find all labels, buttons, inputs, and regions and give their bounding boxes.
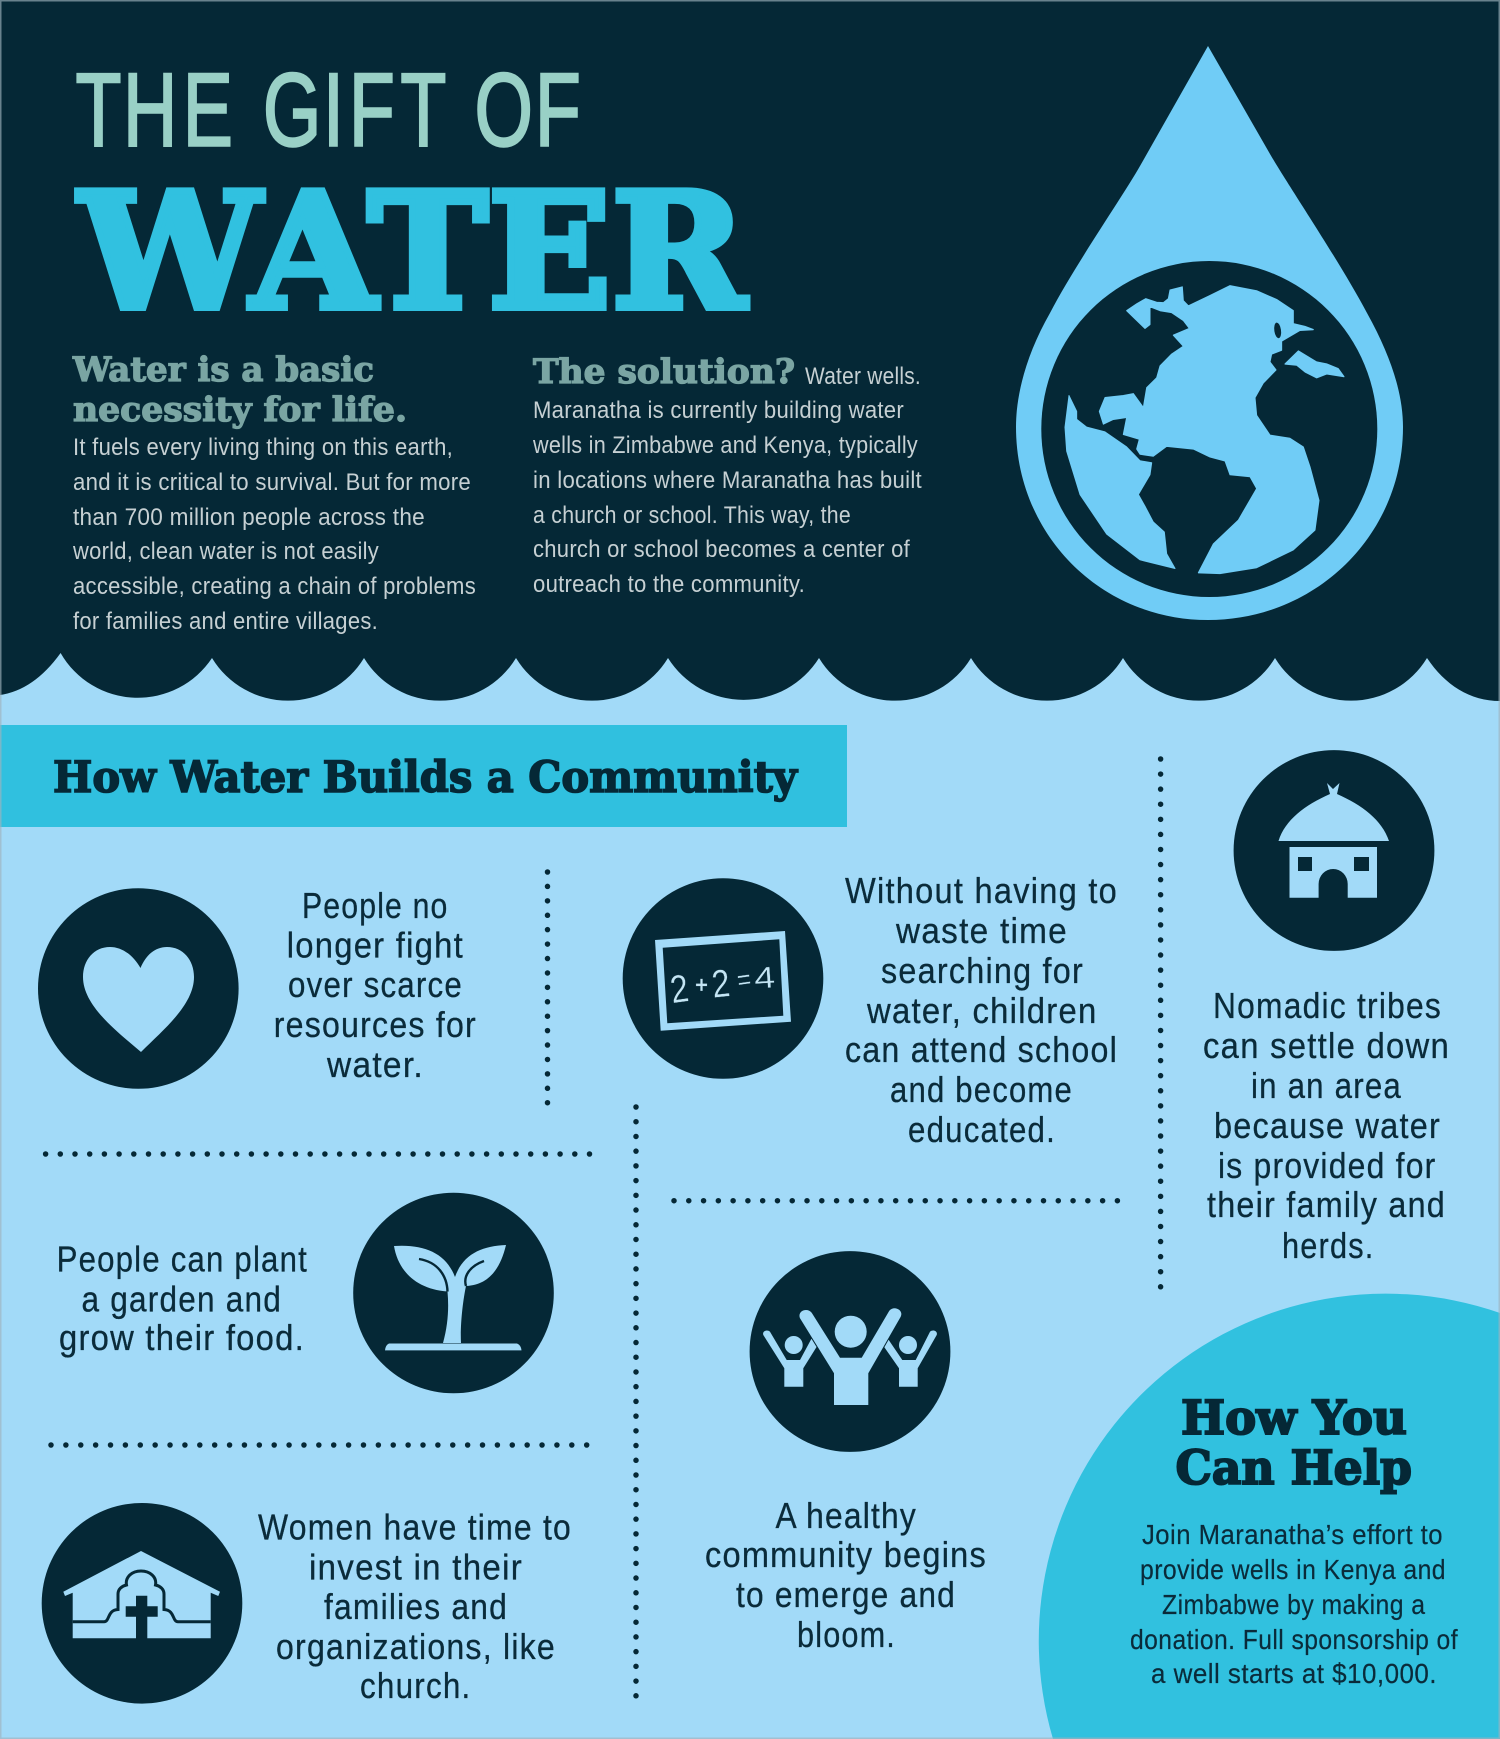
text: people no longer fight: water. [326,1044,424,1085]
text: nomadic tribes: because water [1214,1105,1441,1146]
text: a healthy community: A healthy [776,1495,917,1536]
icon: people with raised arms [750,1251,950,1452]
text: plant a garden [57,1239,308,1358]
text: nomadic tribes: is provided for [1218,1145,1436,1186]
chalk equation: 2 [710,962,732,1007]
text: nomadic tribes: Nomadic tribes [1213,985,1442,1026]
text: children can attend school: Without having to [845,870,1118,911]
text: children can attend school: water, children [866,990,1098,1031]
text block: basic necessity [72,350,476,635]
subheading: basic necessity [72,350,407,430]
text: a healthy community: community begins [705,1534,987,1575]
body: basic necessity: and it is critical to survival. But for more [73,469,471,496]
chalk equation: 2 [668,967,691,1012]
callout body: Zimbabwe by making a [1162,1589,1426,1620]
text: people no longer fight: People no [302,885,448,926]
text: people no longer fight: resources for [274,1004,477,1045]
title: the gift of: THE GIFT OF [76,53,581,169]
icon: sprout [353,1193,554,1393]
subheading: basic necessity: necessity for life. [73,390,407,430]
icon: hut [1234,750,1434,951]
header panel with wave edge [0,0,1500,701]
text: nomadic tribes: their family and [1207,1184,1446,1225]
text: children can attend school [845,870,1118,1150]
text: people no longer fight: longer fight [287,925,464,966]
body: basic necessity: for families and entire villages. [73,608,378,635]
text: nomadic tribes: in an area [1251,1065,1402,1106]
subheading: basic necessity: Water is a basic [72,350,374,390]
callout body: provide wells in Kenya and [1140,1554,1446,1585]
text: plant a garden: a garden and [82,1279,282,1320]
body: basic necessity: world, clean water is not easily [72,538,379,565]
callout body: Join Maranatha’s effort to [1142,1519,1443,1550]
banner: how water builds a community: How Water Builds a Community [53,753,799,803]
text: a healthy community: to emerge and [736,1574,956,1615]
chalk equation: 4 [753,961,776,996]
text: nomadic tribes [1203,985,1450,1266]
callout heading [1176,1391,1412,1496]
text: children can attend school: educated. [908,1109,1056,1150]
text: nomadic tribes: can settle down [1203,1025,1450,1066]
text: women have time [258,1506,572,1706]
body: basic necessity: It fuels every living thing on this earth, [73,434,453,461]
callout background circle [1039,1294,1500,1739]
text: a healthy community: bloom. [797,1614,896,1655]
body: the solution: church or school becomes a center of [533,536,910,563]
icon: heart [38,888,239,1089]
body: basic necessity [72,434,476,635]
subheading: the solution: The solution? [533,352,795,392]
chalk equation: + [695,972,708,999]
chalk equation [668,961,776,1012]
callout body: a well starts at $10,000. [1151,1658,1437,1689]
banner: how water builds a community [0,725,847,827]
chalk equation: = [735,963,753,996]
body: the solution: in locations where Maranatha has built [533,467,922,494]
text: children can attend school: can attend school [845,1029,1118,1070]
text: children can attend school: and become [890,1069,1073,1110]
body: the solution: wells in Zimbabwe and Kenya, typically [532,432,918,459]
callout body: donation. Full sponsorship of [1130,1624,1458,1655]
body: the solution: Water wells. [805,363,921,390]
body: the solution: a church or school. This way, the [533,502,851,529]
panel: how you can help [1039,1294,1500,1739]
icon: church [42,1503,242,1704]
text: women have time: church. [360,1665,472,1706]
text: people no longer fight [274,885,477,1085]
text: women have time: invest in their [309,1546,523,1587]
callout heading: How You [1181,1391,1407,1446]
callout heading: Can Help [1176,1441,1412,1496]
dotted dividers [46,759,1161,1696]
title: water: WATER [77,158,747,346]
text: plant a garden: People can plant [57,1239,308,1280]
icon: chalkboard [623,878,823,1079]
icon: water drop with globe [1016,46,1403,620]
text: women have time: Women have time to [258,1506,572,1548]
text: people no longer fight: over scarce [288,964,463,1005]
text: children can attend school: searching for [881,950,1084,991]
text: plant a garden: grow their food. [59,1317,305,1358]
text: women have time: families and [324,1586,508,1627]
text: nomadic tribes: herds. [1282,1225,1374,1266]
body: basic necessity: than 700 million people across the [73,504,425,531]
text: women have time: organizations, like [276,1626,556,1667]
text: children can attend school: waste time [895,910,1068,951]
body: the solution: Maranatha is currently building water [533,397,904,424]
body: the solution: outreach to the community. [533,571,805,598]
text: a healthy community [705,1495,987,1655]
body: basic necessity: accessible, creating a chain of problems [73,573,476,600]
callout body [1130,1519,1458,1689]
body: the solution [532,363,922,598]
text block: the solution [532,352,922,598]
